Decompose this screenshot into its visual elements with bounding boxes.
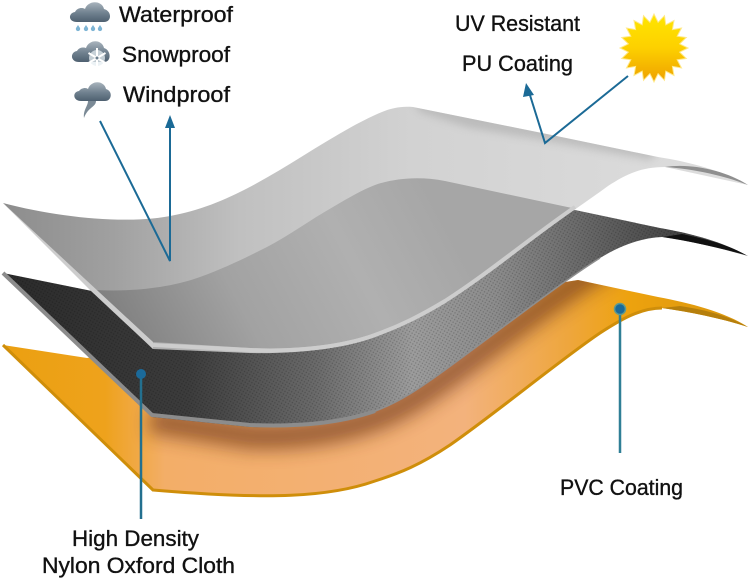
icon: wind cloud <box>74 82 111 118</box>
label: PU Coating: PU Coating <box>462 51 573 76</box>
label: Snowproof: Snowproof <box>122 42 231 67</box>
label: Nylon Oxford Cloth: Nylon Oxford Cloth <box>42 553 235 578</box>
label: Windproof: Windproof <box>123 82 231 107</box>
arrow: UV resistant callout <box>523 76 628 143</box>
label: UV Resistant: UV Resistant <box>455 11 580 36</box>
icon: snow cloud <box>72 41 110 68</box>
layer: orange PVC coating <box>3 262 748 496</box>
label: High Density: High Density <box>72 526 199 551</box>
icon: sun <box>620 14 688 82</box>
callout: PVC coating leader <box>614 304 626 453</box>
layer: gray PU coating sheet <box>3 100 748 353</box>
icon: rain cloud <box>70 2 110 31</box>
arrow: waterproof and windproof callout <box>100 115 175 261</box>
label: PVC Coating: PVC Coating <box>560 475 683 500</box>
label: Waterproof: Waterproof <box>119 2 234 27</box>
layer: black nylon oxford cloth <box>3 210 748 427</box>
callout: nylon cloth leader <box>136 369 146 519</box>
